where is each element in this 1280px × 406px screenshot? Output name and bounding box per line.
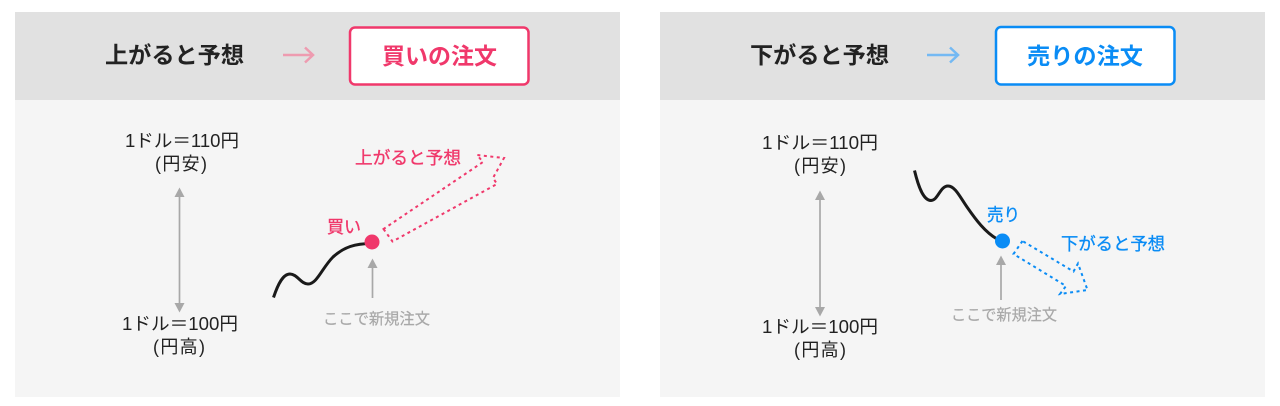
button: buy order: 買いの注文 (382, 43, 497, 69)
arrow: header pink (283, 48, 313, 62)
arrow head: range bottom (174, 303, 184, 312)
label: 100 yen: (円高) (153, 337, 205, 357)
label: 100 yen: 1ドル＝100円 (762, 317, 878, 337)
label: 100 yen (762, 317, 878, 360)
dashed arrow: up (384, 155, 504, 242)
label: 100 yen: 1ドル＝100円 (122, 314, 238, 334)
label: 110 yen: (円安) (794, 156, 846, 176)
label: 110 yen (762, 133, 878, 176)
panel: sell (660, 12, 1265, 397)
dot: buy point (364, 234, 380, 250)
panel header: sell (660, 12, 1265, 100)
chart line: falling (914, 170, 997, 239)
heading: expect fall: 下がると予想 (750, 42, 889, 68)
label: 110 yen: 1ドル＝110円 (762, 133, 878, 153)
arrow head: range top (815, 190, 825, 200)
arrow head: range top (174, 188, 184, 197)
arrow: entry point (368, 258, 378, 298)
button: sell order (996, 27, 1174, 84)
panel header: buy (15, 12, 620, 100)
label: 100 yen: (円高) (794, 340, 846, 360)
arrow: range (178, 196, 180, 304)
arrow: header blue (927, 48, 958, 62)
dot: sell point (995, 234, 1010, 248)
button: sell order: 売りの注文 (1027, 43, 1143, 69)
arrow: entry point (996, 256, 1006, 300)
heading: expect rise: 上がると予想 (105, 42, 244, 68)
label: 110 yen: 1ドル＝110円 (125, 131, 239, 151)
label: new order here: ここで新規注文 (323, 310, 430, 328)
arrow head: range bottom (815, 307, 825, 316)
label: expect rise: 上がると予想 (355, 148, 461, 168)
arrow: range (819, 199, 821, 308)
label: 110 yen: (円安) (155, 154, 207, 174)
dashed arrow: down (1014, 241, 1088, 294)
label: 100 yen (122, 314, 238, 357)
label: buy: 買い (327, 217, 361, 237)
label: 110 yen (125, 131, 239, 174)
chart line: rising (274, 244, 372, 298)
label: expect fall: 下がると予想 (1061, 234, 1165, 254)
label: sell: 売り (987, 205, 1020, 225)
label: new order here: ここで新規注文 (951, 306, 1057, 324)
button: buy order (350, 28, 528, 84)
panel: buy (15, 12, 620, 397)
